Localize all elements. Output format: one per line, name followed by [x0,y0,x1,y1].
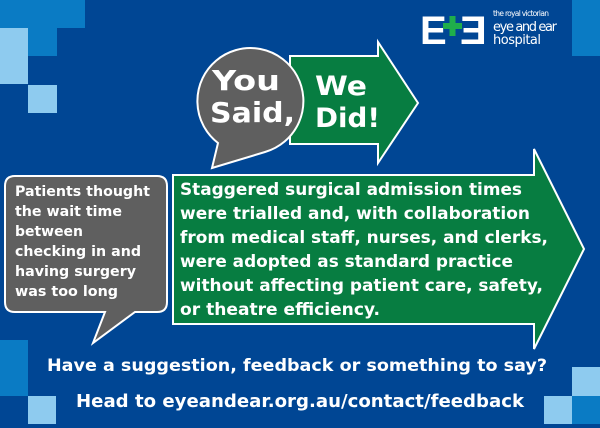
arrow: action taken: Staggered surgical admission times [180,180,522,200]
arrow: action taken: without affecting patient care, safety, [180,276,543,296]
arrow: action taken [173,149,584,349]
logo: E [420,9,447,53]
arrow: We Did: We [315,71,367,102]
bubble: You Said [197,48,303,168]
bubble: patient comment: was too long [15,284,118,300]
logo: the royal victorian [493,9,549,18]
logo: eye and ear [493,20,558,35]
bubble: patient comment: between [15,224,83,240]
arrow: We Did [290,42,418,163]
logo: Ǝ [460,9,487,53]
arrow: action taken: were trialled and, with collaboration [180,204,530,224]
feedback url: Head to eyeandear.org.au/contact/feedback [76,391,525,412]
decorative squares top-left [0,0,85,113]
bubble: You Said: You [211,64,280,97]
bubble: patient comment: the wait time [15,204,122,220]
arrow: action taken: were adopted as standard practice [180,252,513,272]
logo: hospital [493,33,541,48]
arrow: action taken: or theatre efficiency. [180,300,380,320]
logo [420,9,558,53]
call to action: Have a suggestion, feedback or something to say? [47,356,547,376]
bubble: patient comment: Patients thought [15,184,150,200]
arrow: We Did: Did! [315,103,380,134]
bubble: patient comment [5,176,167,343]
bubble: patient comment: having surgery [15,264,137,280]
bubble: You Said: Said, [210,96,295,129]
arrow: action taken: from medical staff, nurses, and clerks, [180,228,548,248]
bubble: patient comment: checking in and [15,244,141,260]
